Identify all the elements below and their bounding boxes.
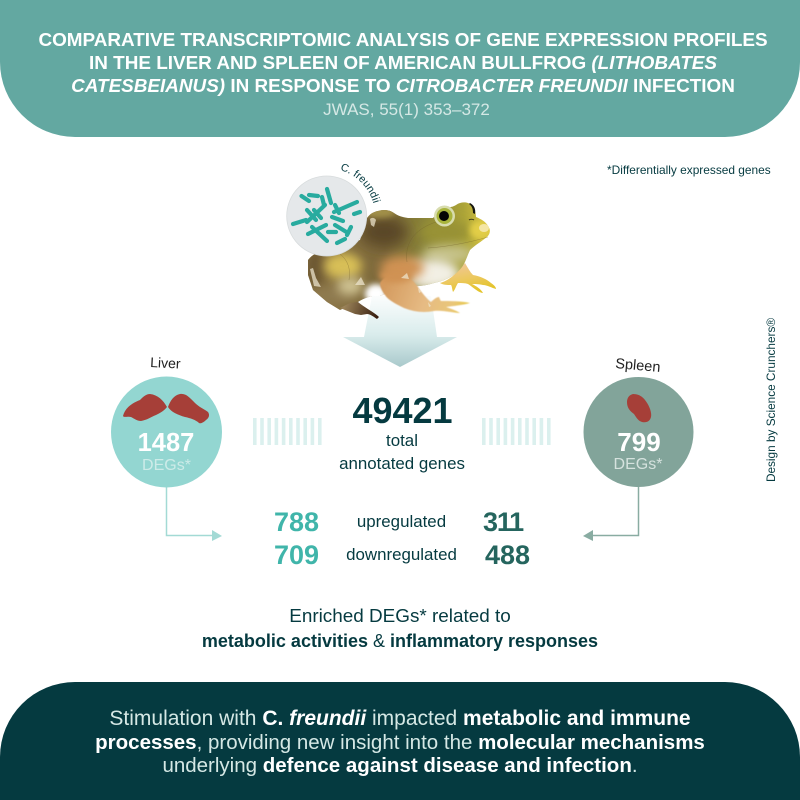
conclusion text: Stimulation with C. freundii impacted metabolic and immune <box>109 707 691 730</box>
enriched DEGs text: Enriched DEGs* related to <box>289 606 511 627</box>
liver connector arrow <box>166 487 222 541</box>
icon: frog <box>300 195 496 319</box>
downregulated liver: 709 <box>274 540 319 570</box>
frog far leg <box>440 263 496 293</box>
upregulated label: upregulated <box>357 512 446 531</box>
liver DEGs label: DEGs* <box>142 457 191 474</box>
title: COMPARATIVE TRANSCRIPTOMIC ANALYSIS OF GENE EXPRESSION PROFILES <box>38 30 768 50</box>
title <box>38 30 768 97</box>
frog foot <box>340 302 379 319</box>
conclusion text <box>95 707 705 777</box>
total genes number: 49421 <box>352 390 453 431</box>
conclusion text: underlying defence against disease and infection. <box>162 754 638 777</box>
label: Spleen: Spleen <box>615 356 661 376</box>
liver count: 1487 <box>138 429 194 457</box>
spleen connector arrow <box>583 487 638 541</box>
downregulated spleen: 488 <box>485 540 530 570</box>
frog nostril <box>469 218 474 221</box>
footnote: *Differentially expressed genes <box>607 163 771 177</box>
frog skin highlights <box>310 218 431 307</box>
icon: liver <box>123 394 209 423</box>
frog far eye <box>469 203 475 214</box>
credit: Design by Science Crunchers® <box>764 318 778 482</box>
label: Liver: Liver <box>150 354 181 372</box>
frog chest blend <box>379 269 413 283</box>
icon: bacteria circle <box>287 176 367 256</box>
spleen circle <box>584 377 694 487</box>
left striped bar <box>253 418 322 445</box>
frog nose highlight <box>479 224 489 232</box>
icon: spleen <box>627 394 651 422</box>
enriched DEGs text <box>202 606 598 651</box>
illustration: frog with bacteria and arrow <box>111 164 694 541</box>
upregulated liver: 788 <box>274 507 319 537</box>
total genes label <box>339 431 465 473</box>
title: IN THE LIVER AND SPLEEN OF AMERICAN BULLFROG (LITHOBATES <box>89 53 717 74</box>
spleen count: 799 <box>617 427 661 457</box>
total genes label: annotated genes <box>339 454 465 473</box>
spleen DEGs label: DEGs* <box>614 456 662 473</box>
enriched DEGs text: metabolic activities & inflammatory responses <box>202 631 598 651</box>
upregulated spleen: 311 <box>483 507 523 537</box>
frog eye <box>434 206 455 226</box>
liver circle <box>111 376 222 488</box>
total genes label: total <box>386 431 418 450</box>
frog front leg <box>380 274 470 313</box>
conclusion text: processes, providing new insight into the molecular mechanisms <box>95 730 705 754</box>
journal citation: JWAS, 55(1) 353–372 <box>323 100 490 119</box>
frog contour lines <box>326 222 488 280</box>
downregulated label: downregulated <box>346 545 457 564</box>
footer panel <box>0 682 800 800</box>
header panel <box>0 0 800 137</box>
label: C. freundii: C. freundii <box>342 164 381 203</box>
frog body and hind leg <box>308 202 490 310</box>
arrow <box>343 296 457 367</box>
right striped bar <box>482 418 551 445</box>
title: CATESBEIANUS) IN RESPONSE TO CITROBACTER FREUNDII INFECTION <box>71 76 735 97</box>
